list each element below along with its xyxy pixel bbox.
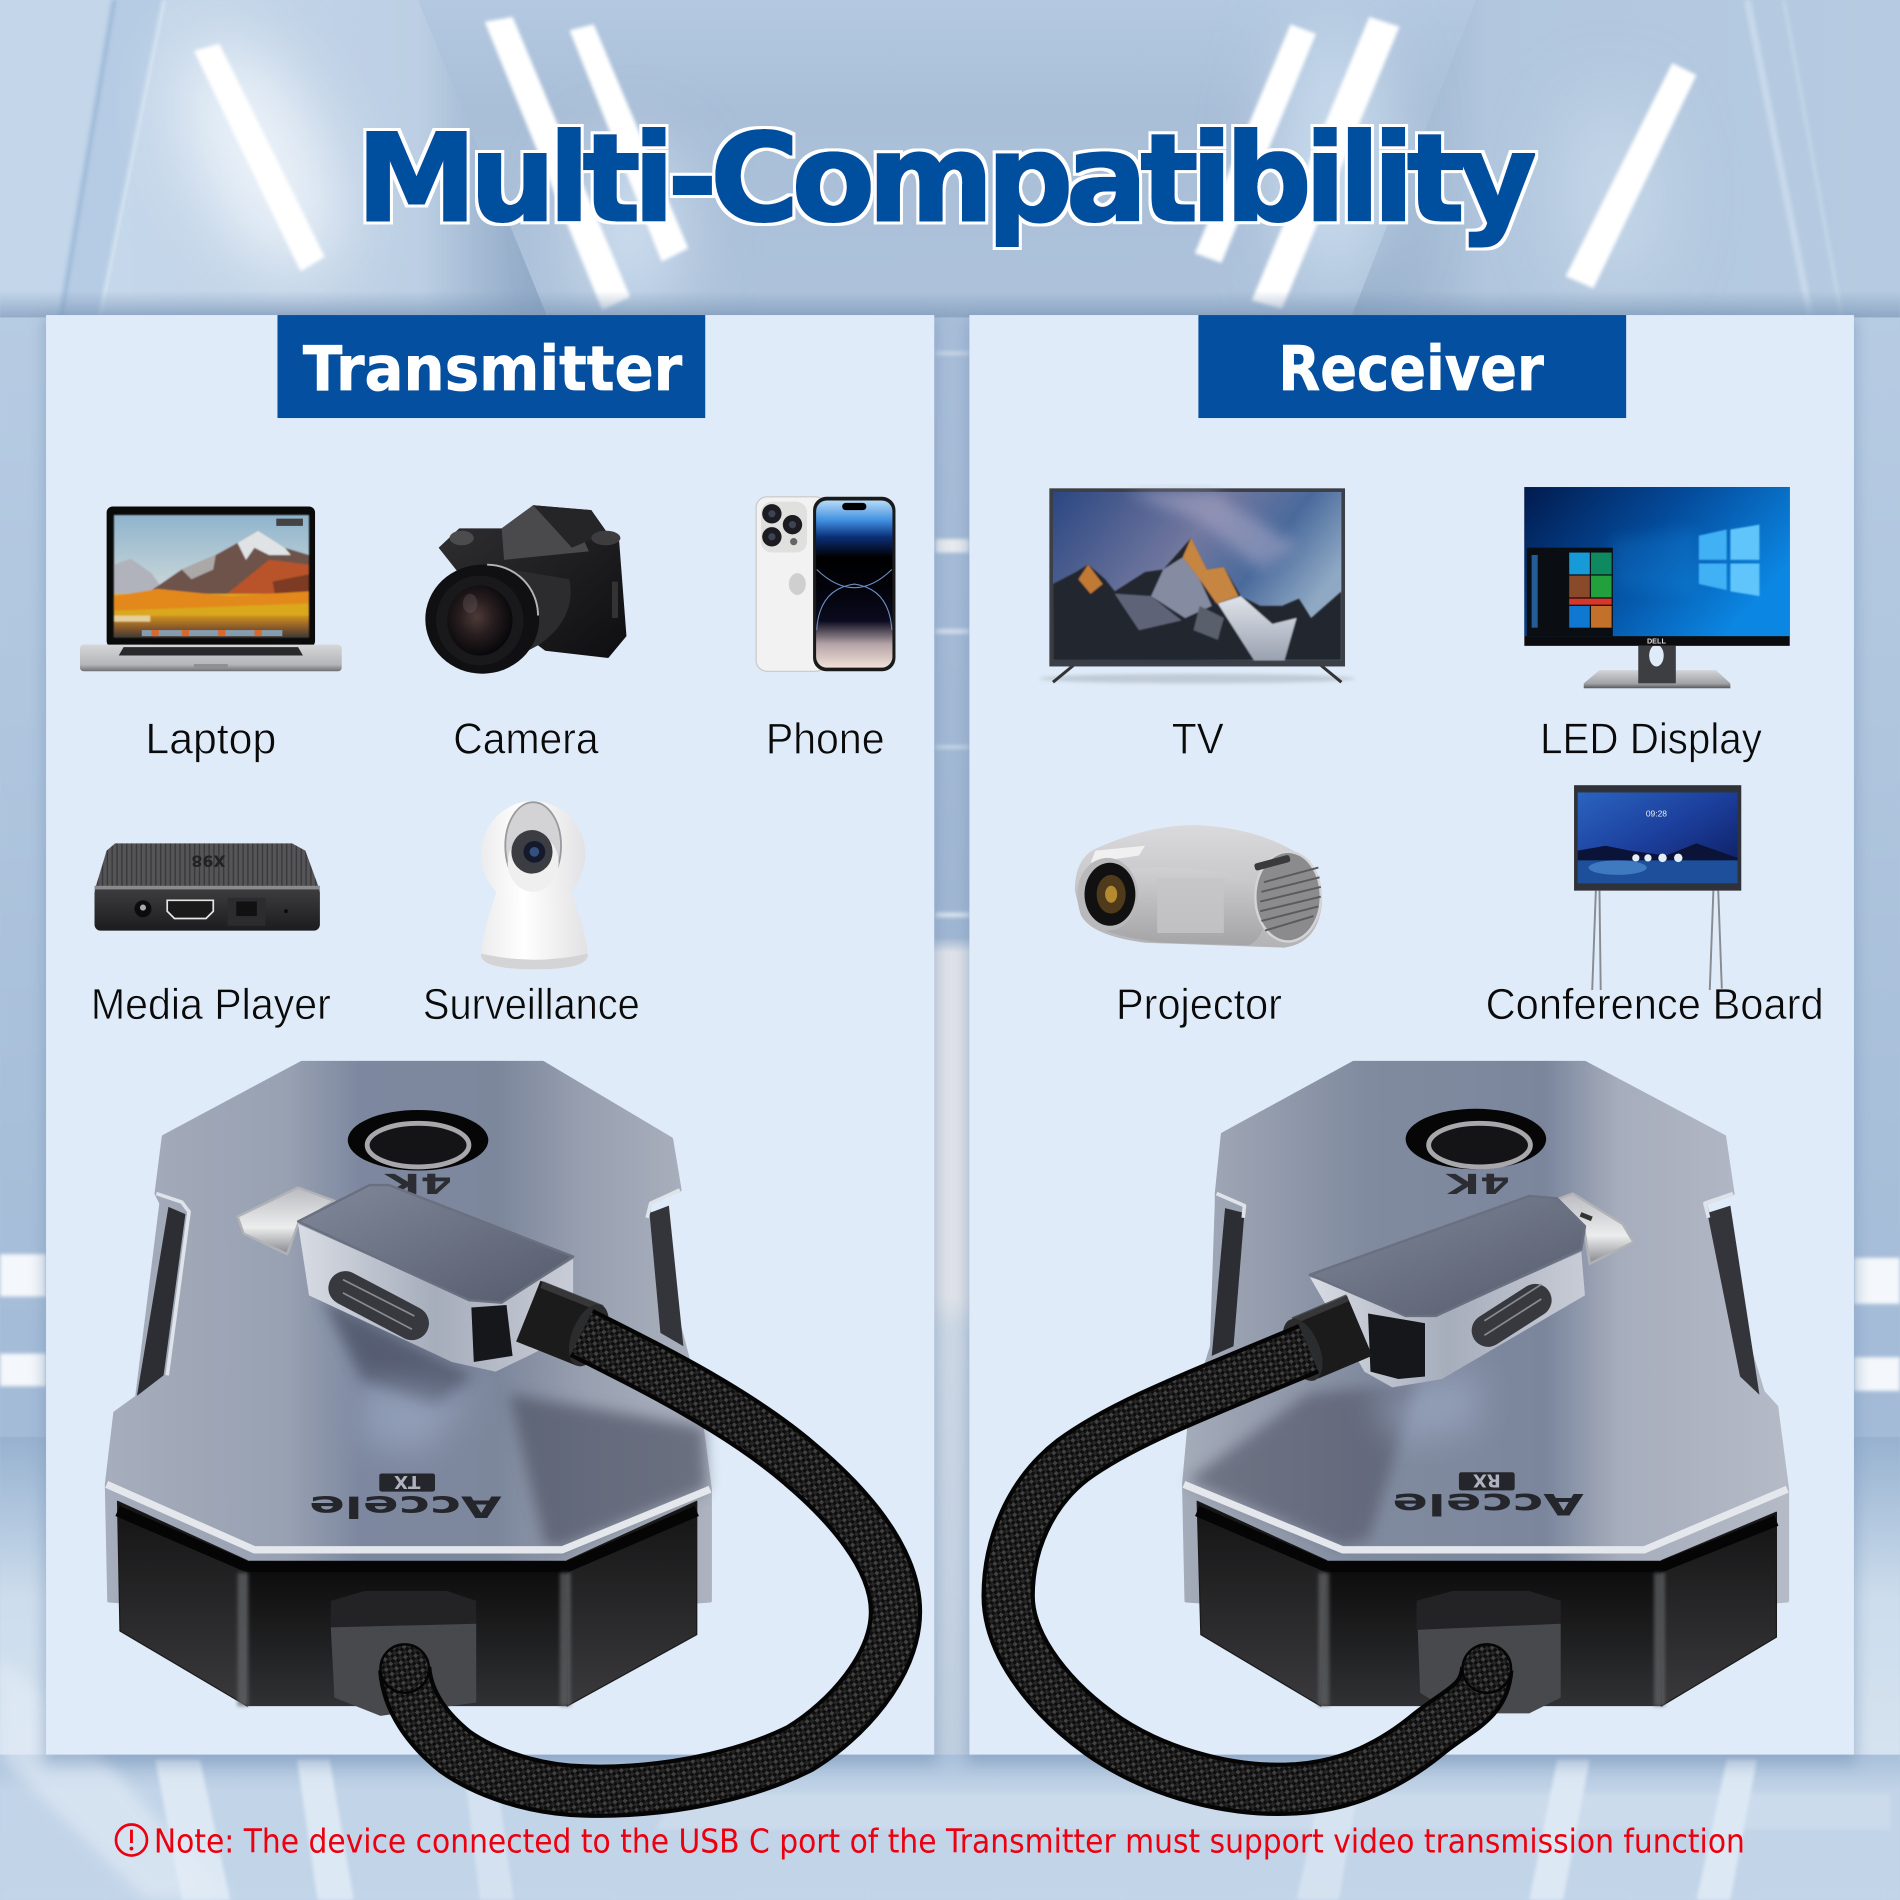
icon: media player (95, 843, 320, 931)
strain relief (528, 1284, 617, 1372)
note text: Note: The device connected to the USB C port of the Transmitter must support video transmission function (154, 1823, 1745, 1861)
heading: Receiver: Receiver (1278, 333, 1544, 405)
USB-C dongle (238, 1185, 573, 1372)
icon: projector (1075, 825, 1322, 948)
braided cable (380, 1333, 895, 1791)
brand: Accele TX (309, 1471, 502, 1523)
plug block (331, 1591, 476, 1716)
device body top plate (1184, 1063, 1787, 1612)
icon: media player: X98 (191, 851, 225, 870)
4K marking: 4K (1445, 1167, 1510, 1200)
heading: Transmitter (277, 315, 705, 418)
label: Projector (1116, 981, 1282, 1029)
label: LED Display (1540, 716, 1762, 764)
HDMI dongle (1310, 1194, 1633, 1387)
heading: Receiver (1198, 315, 1626, 418)
icon: LED display: DELL (1647, 636, 1666, 645)
braided cable (1008, 1349, 1511, 1789)
label: Camera (453, 716, 599, 764)
button ring (348, 1110, 488, 1171)
icon: conference board (1574, 785, 1741, 990)
device body top plate (107, 1063, 710, 1612)
label: Laptop (145, 716, 276, 764)
title: Multi-Compatibility (356, 109, 1536, 250)
device: receiver (1008, 1063, 1787, 1789)
strain relief (1275, 1298, 1360, 1387)
brand: Accele RX: Accele (1392, 1487, 1584, 1521)
panel: transmitter background (46, 315, 934, 1755)
label: TV (1172, 716, 1224, 764)
icon: warning (116, 1825, 147, 1856)
4K marking: 4K (383, 1167, 452, 1200)
icon: LED display (1524, 487, 1790, 688)
light strips (194, 17, 1696, 310)
icon: laptop (80, 507, 342, 671)
heading: Transmitter: Transmitter (303, 333, 683, 405)
label: Media Player (91, 981, 331, 1029)
brand: Accele RX: RX (1473, 1470, 1501, 1491)
note with warning icon (116, 1823, 1745, 1861)
icon: camera (425, 505, 626, 674)
icon: conference board: 09:28 (1646, 809, 1667, 819)
device: transmitter (107, 1063, 895, 1791)
brand: Accele TX: Accele (309, 1489, 502, 1523)
button ring (1406, 1109, 1546, 1169)
brand: Accele RX (1392, 1470, 1584, 1521)
icon: surveillance camera (481, 801, 588, 969)
icon: phone (756, 497, 895, 671)
device black enclosure (1197, 1501, 1776, 1706)
icon: TV (1040, 488, 1355, 683)
device black enclosure (118, 1501, 697, 1706)
brand: Accele TX: TX (394, 1471, 420, 1492)
panel: receiver background (969, 315, 1854, 1755)
label: Phone (766, 716, 885, 764)
label: Conference Board (1486, 981, 1824, 1029)
label: Surveillance (423, 981, 640, 1029)
plug block (1417, 1591, 1561, 1713)
